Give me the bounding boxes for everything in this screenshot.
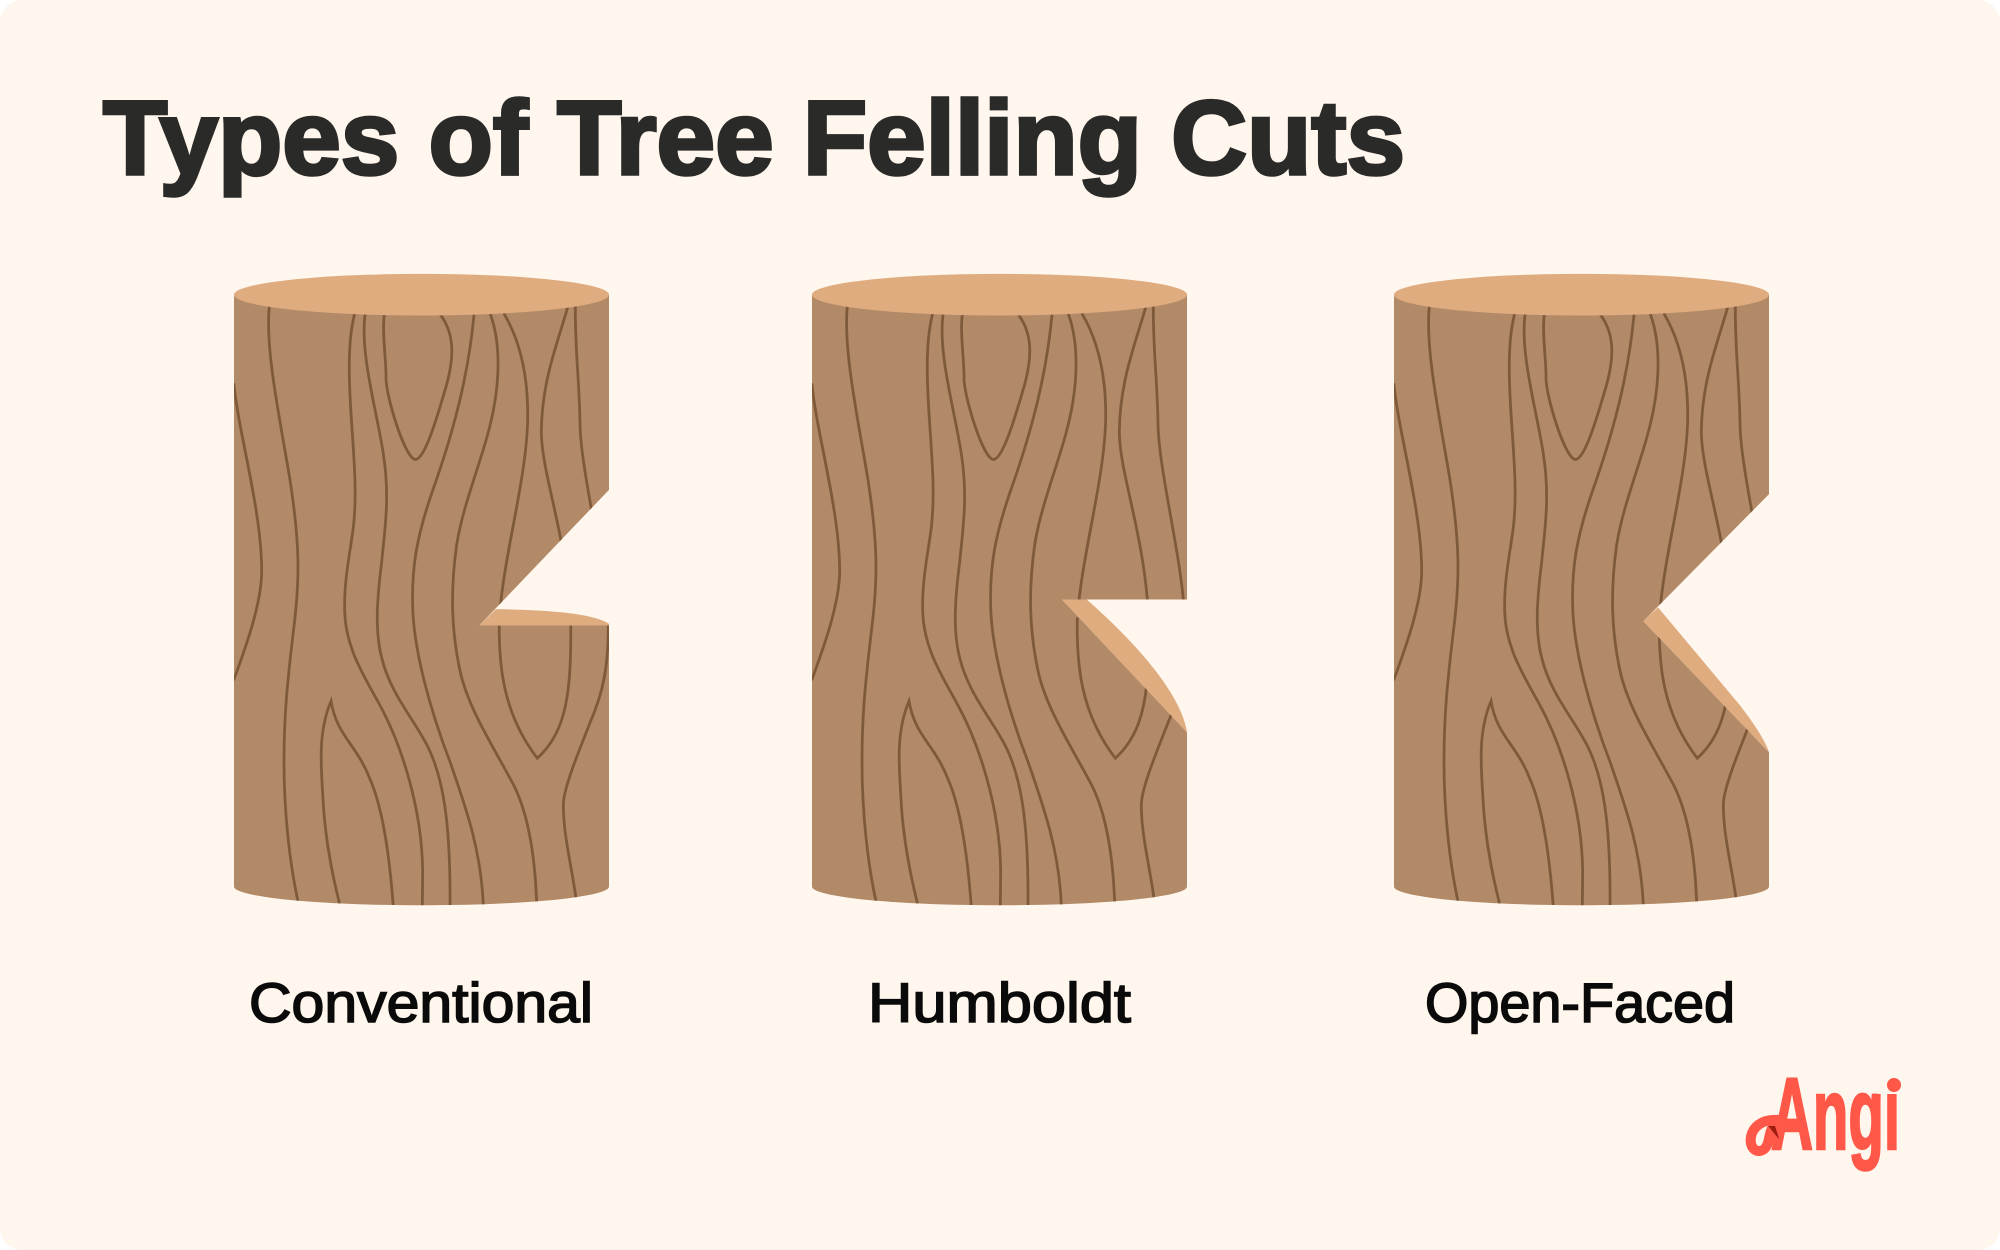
logo: Angi: Angi [1771, 1057, 1900, 1171]
label: open-faced: Open-Faced [1425, 971, 1735, 1034]
log: open-faced cut [1394, 274, 1769, 907]
logo: Angi [1751, 1057, 1906, 1171]
title: Types of Tree Felling Cuts [103, 80, 1405, 197]
label: humboldt: Humboldt [868, 971, 1131, 1034]
log: conventional cut [234, 274, 609, 907]
log: humboldt cut [812, 274, 1187, 907]
label: conventional: Conventional [249, 971, 593, 1034]
